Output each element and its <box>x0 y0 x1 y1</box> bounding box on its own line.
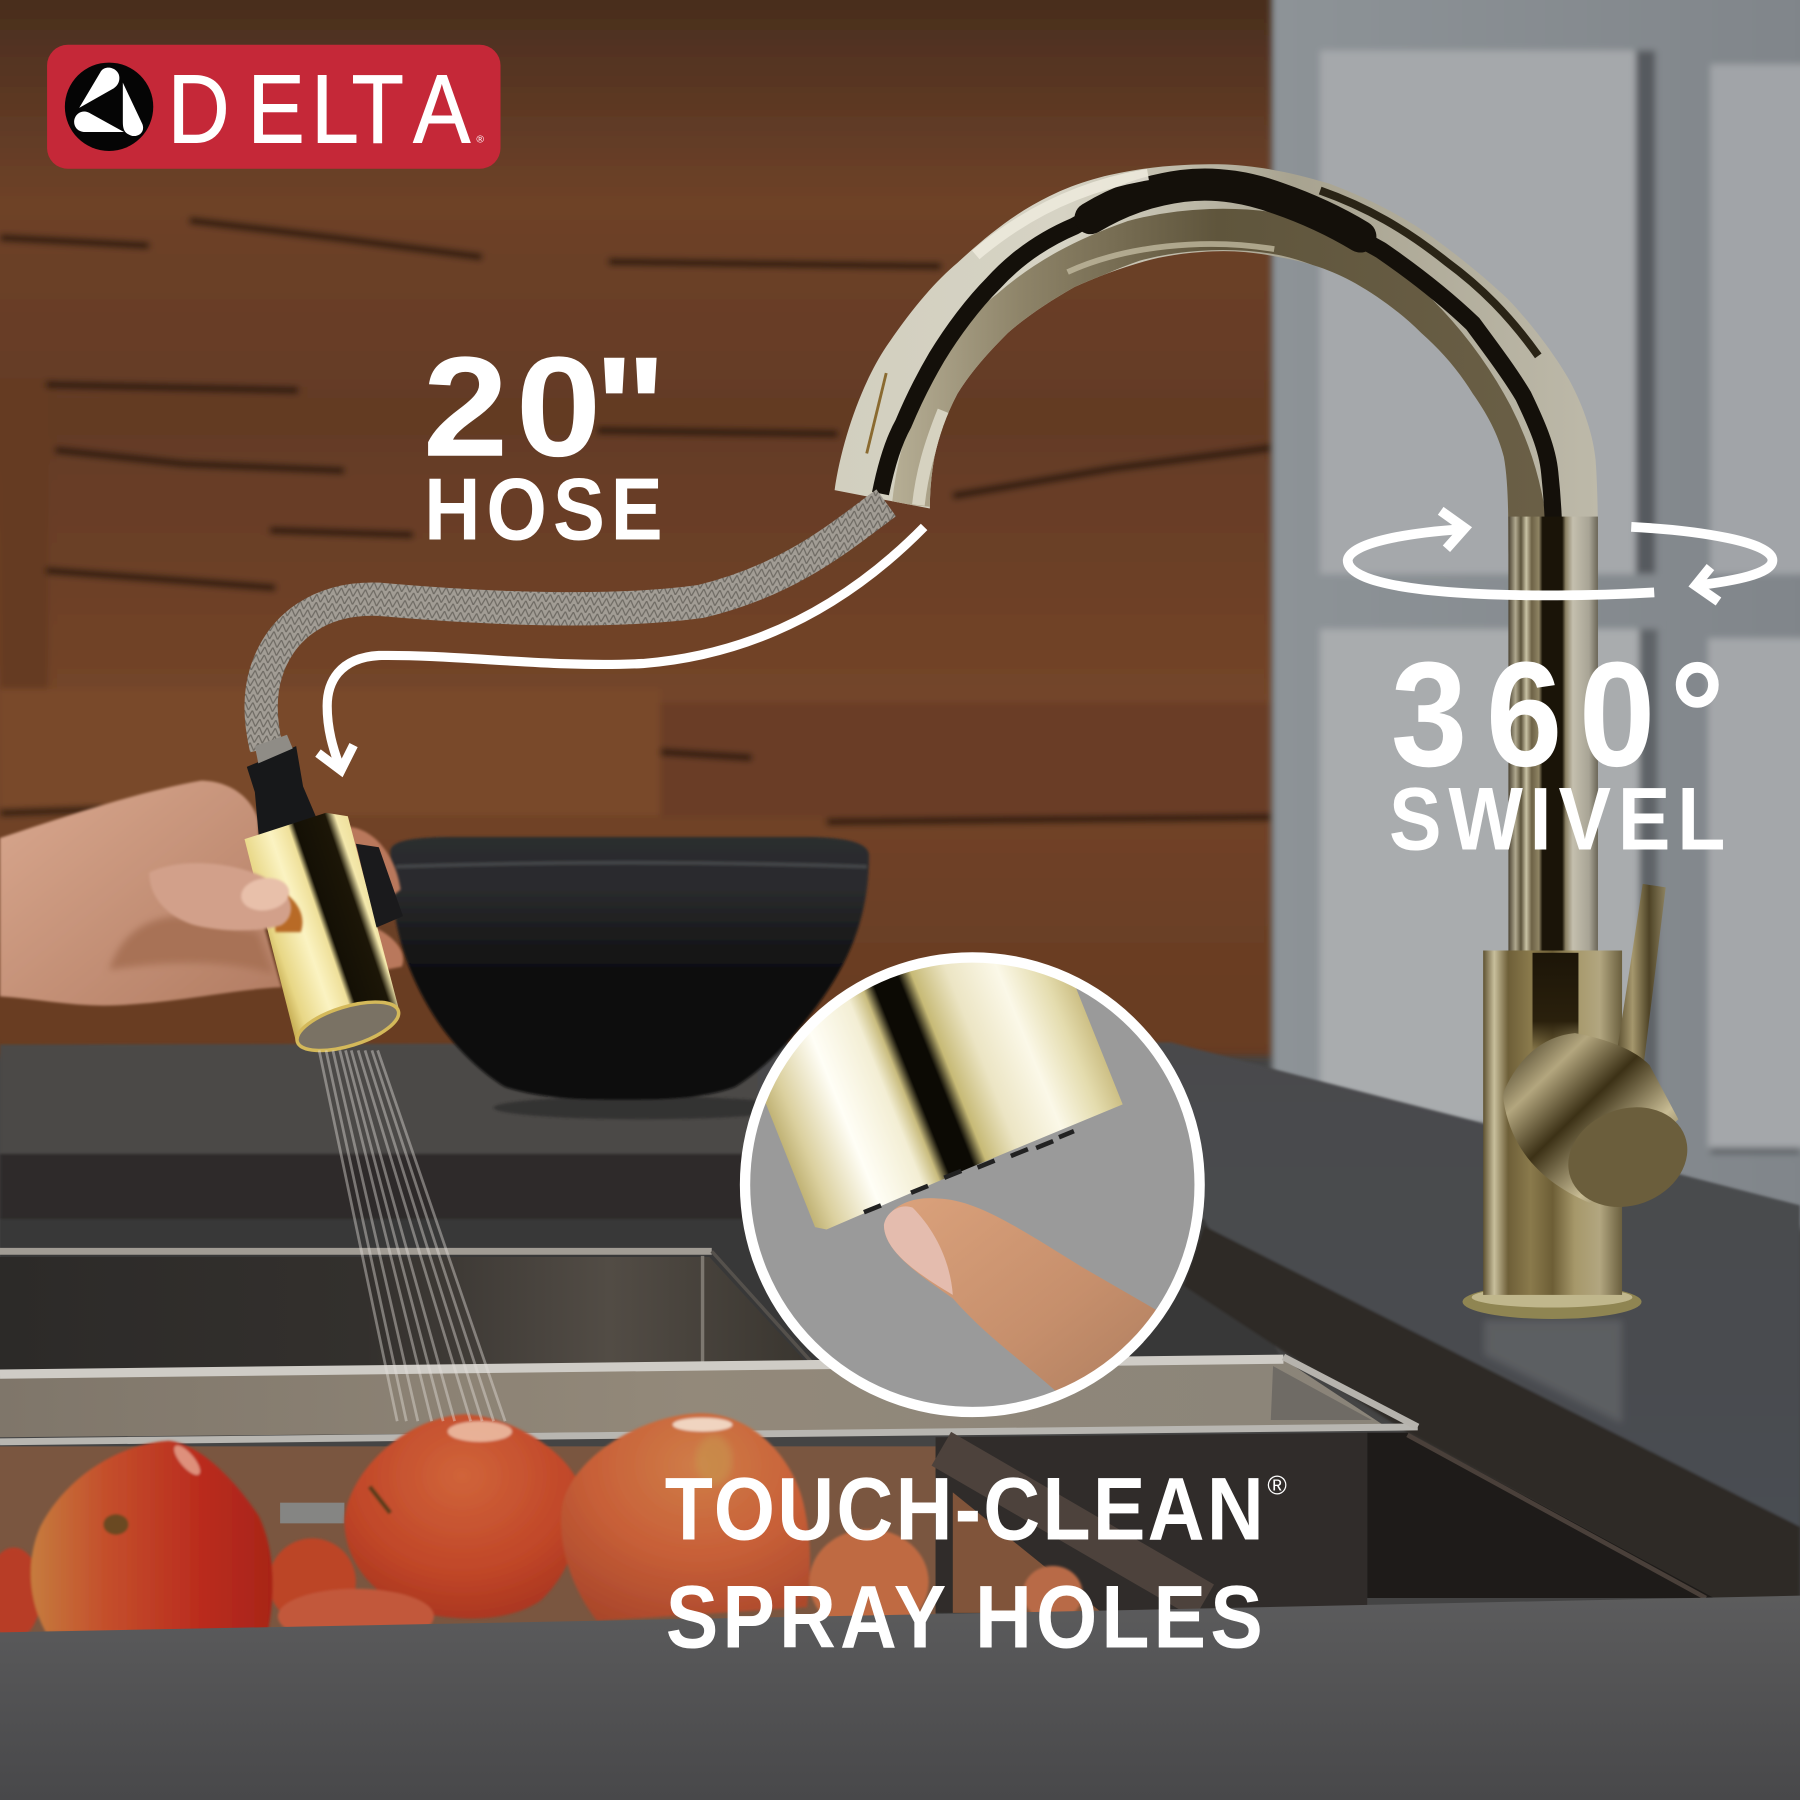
black bowl <box>390 837 869 1119</box>
water spray <box>319 1050 505 1421</box>
nozzle <box>766 962 1123 1230</box>
trigger button <box>356 844 403 928</box>
black collar <box>247 746 319 844</box>
thumb nail <box>239 875 291 914</box>
foreground counter <box>0 1596 1800 1800</box>
heading: 360 swivel: SWIVEL <box>1389 769 1725 869</box>
swivel rotation arrows <box>1348 511 1772 602</box>
handle end cap <box>1554 1091 1701 1223</box>
finger <box>884 1198 1156 1390</box>
base flange <box>1462 1285 1642 1319</box>
faucet <box>827 161 1701 1319</box>
logo: Delta: ® <box>476 134 484 145</box>
heading: touch-clean spray holes: TOUCH-CLEAN <box>665 1459 1264 1559</box>
hand behind sprayer <box>0 781 403 1006</box>
heading: touch-clean spray holes <box>665 1459 1287 1666</box>
crease shadow <box>109 916 273 973</box>
heading: 360 swivel: 360° <box>1391 631 1725 798</box>
handle lever <box>1611 884 1666 1100</box>
fingers behind sprayer <box>344 827 403 970</box>
dark reflection stripe <box>872 216 1562 517</box>
back apples <box>0 1529 1083 1639</box>
front middle apple <box>344 1414 580 1619</box>
heading: 360 swivel <box>1389 631 1725 869</box>
pull-down hose <box>261 503 886 748</box>
nozzle face <box>292 992 404 1060</box>
heading: touch-clean spray holes: ® <box>1267 1471 1287 1501</box>
spout riser <box>1508 517 1598 953</box>
apples <box>0 1413 1083 1644</box>
sink basins <box>0 1251 1714 1636</box>
spray holes <box>863 1129 1075 1214</box>
thumb reflection <box>271 886 302 932</box>
inner reflection band <box>913 229 1530 580</box>
heading: 20 inch hose: 20" <box>423 328 667 486</box>
valve body <box>1483 951 1622 1295</box>
hose arrow <box>318 527 924 770</box>
wordmark: DELTA <box>168 55 471 164</box>
thumb <box>149 863 291 930</box>
handle cylinder <box>1503 1033 1678 1203</box>
heading: touch-clean spray holes: SPRAY HOLES <box>666 1567 1263 1666</box>
right arrow <box>1631 527 1772 602</box>
logo: Delta <box>47 45 501 169</box>
heading: 20 inch hose: HOSE <box>424 460 663 559</box>
countertop back <box>0 1042 1800 1601</box>
spout <box>827 161 1607 580</box>
inset: touch-clean nozzle close-up <box>701 941 1200 1423</box>
gold body <box>245 813 399 1042</box>
fingernail <box>884 1206 953 1295</box>
grey panelled wall <box>1272 0 1800 1228</box>
left arrow <box>1348 511 1654 595</box>
front right apple <box>561 1413 810 1621</box>
spray head <box>245 735 404 1060</box>
heading: 20 inch hose <box>423 328 667 559</box>
logo mark <box>65 63 153 151</box>
palm <box>0 781 281 1006</box>
wood plank wall <box>0 0 1273 1056</box>
front left apple <box>31 1441 273 1632</box>
